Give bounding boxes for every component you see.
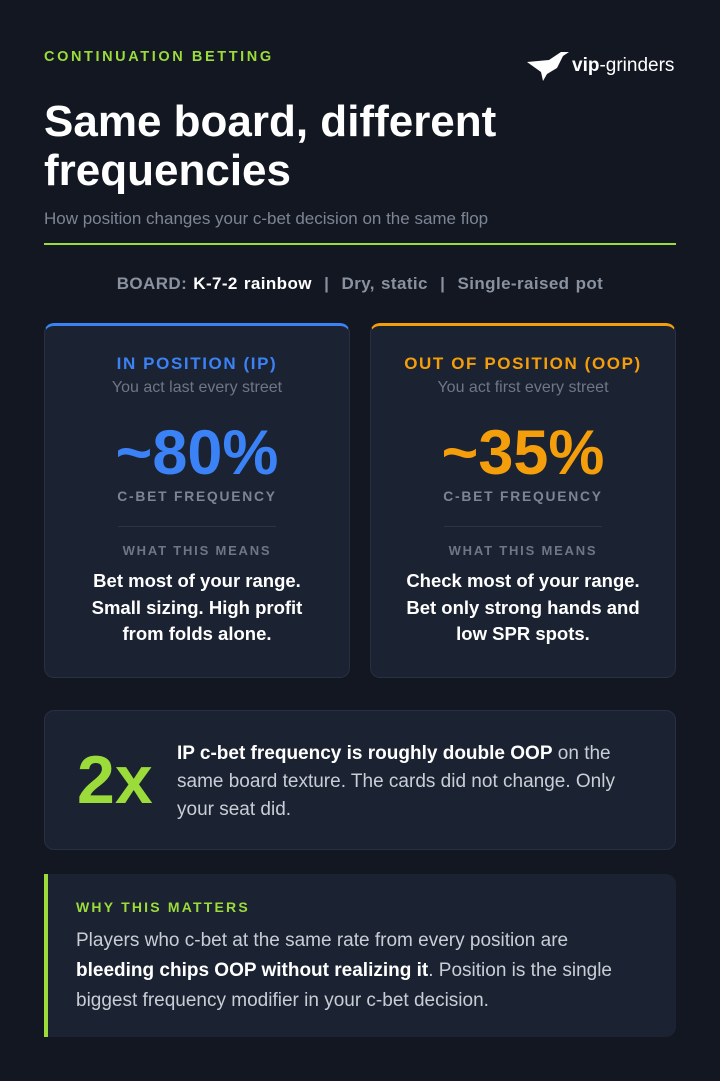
panel: out of position: OUT OF POSITION (OOP) [404, 354, 642, 373]
panel: in position: Small sizing. High profit [92, 596, 302, 618]
panel: out of position: ~35% [442, 418, 604, 488]
panel: out of position: You act first every street [437, 379, 609, 396]
panel: out of position: Bet only strong hands and [406, 596, 640, 618]
title: Same board, different frequencies [44, 97, 496, 195]
panel: why this matters: Players who c-bet at the same rate from every position are bleeding chips OOP without realizing it. Position is the single biggest frequency modifier in your c-bet decision. [76, 930, 612, 1011]
callout: 2x: 2x [77, 742, 153, 818]
panel: in position: C-BET FREQUENCY [117, 489, 277, 504]
panel: in position: IN POSITION (IP) [117, 354, 277, 373]
panel: in position: You act last every street [112, 379, 282, 396]
panel: out of position: Check most of your range. [406, 570, 640, 591]
callout: 2x: IP c-bet frequency is roughly double OOP on the same board texture. The cards did not change. Only your seat did. [177, 743, 615, 820]
panel: out of position: low SPR spots. [456, 623, 590, 644]
panel: in position: Bet most of your range. [93, 570, 301, 591]
panel: out of position: C-BET FREQUENCY [443, 489, 603, 504]
panel: why this matters [44, 874, 676, 1037]
panel: out of position [370, 323, 676, 678]
board line: BOARD: K-7-2 rainbow | Dry, static | Single-raised pot [117, 274, 603, 293]
panel: in position: ~80% [116, 418, 278, 488]
panel: out of position: WHAT THIS MEANS [449, 543, 597, 558]
subtitle: How position changes your c-bet decision on the same flop [44, 209, 488, 228]
logo [527, 52, 674, 81]
panel: in position: from folds alone. [122, 623, 272, 644]
kicker: CONTINUATION BETTING [44, 49, 274, 65]
panel: in position [44, 323, 350, 678]
logo: vip-grinders [572, 55, 674, 76]
panel: why this matters: WHY THIS MATTERS [76, 899, 250, 915]
panel: in position: WHAT THIS MEANS [123, 543, 271, 558]
callout: 2x [44, 710, 676, 850]
